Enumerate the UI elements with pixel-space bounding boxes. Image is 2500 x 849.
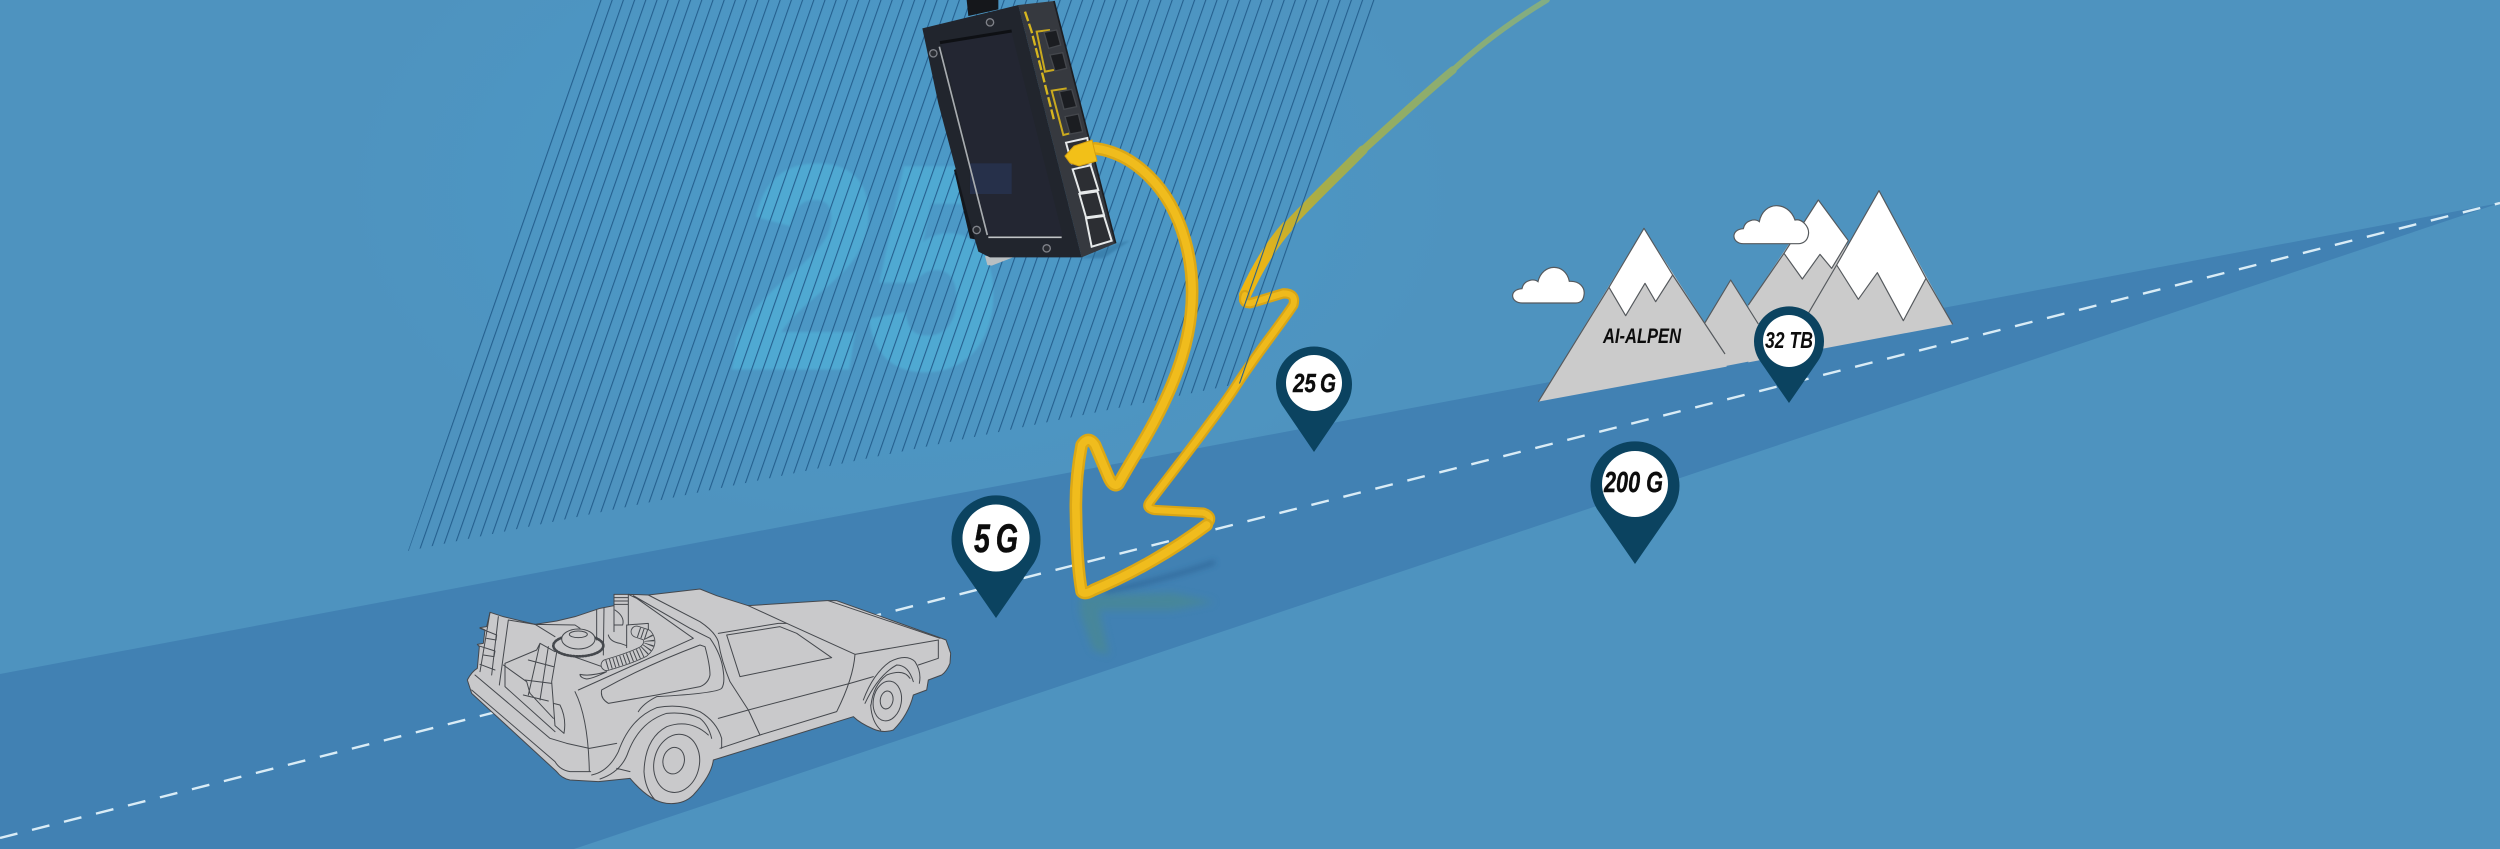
inner panel: [942, 32, 1063, 235]
yellow label strip: [1025, 12, 1054, 120]
faded blue overlay: [970, 163, 1012, 194]
big faded number 25: 25: [734, 107, 1005, 429]
cable shadow on road: [1105, 562, 1215, 592]
upper ports: [1044, 30, 1083, 134]
front wheel: [870, 672, 910, 730]
cable lower section: [1148, 293, 1294, 525]
cable tail: [1245, 0, 1547, 295]
top connector: [967, 0, 998, 16]
front wheel arch: [863, 657, 920, 703]
hatched stripe field: [400, 0, 1400, 560]
side panel: [1018, 1, 1116, 257]
mountains: AI-Alpen: [1513, 191, 1953, 402]
side panel dark edge: [1054, 1, 1116, 243]
map pin: 5G: [952, 495, 1040, 618]
time machine pipes: [597, 594, 648, 655]
snow caps: [1609, 191, 1926, 321]
road centre dashed line: [0, 203, 2500, 838]
device shadow: [1080, 241, 1130, 258]
car: DeLorean time machine: [467, 589, 951, 804]
network switch device: [922, 0, 1130, 266]
yellow cable: right strand fading to green: [1148, 0, 1547, 525]
pin label 200 G: 200 G: [1603, 467, 1663, 499]
lower ports: [1066, 138, 1112, 247]
map pin: 32 TB: [1754, 306, 1824, 403]
glow behind hatching: [340, 0, 1460, 530]
rear quarter window: [601, 645, 710, 703]
cloud left: [1513, 267, 1584, 303]
front panel: [922, 5, 1082, 257]
map pin: 200 G: [1590, 441, 1680, 564]
corrugated hose: [607, 632, 649, 665]
cable upper section outline: [1076, 148, 1207, 593]
pin label 25G: 25 G: [1292, 368, 1336, 398]
left clip: [954, 167, 978, 240]
pin label 5G: 5 G: [974, 517, 1018, 561]
rear fins and louvres: [478, 612, 580, 685]
panel trim: [939, 31, 1062, 237]
flux gear: [553, 629, 603, 656]
screws: [930, 19, 1050, 252]
map pin: 25G: [1276, 347, 1352, 452]
yellow cable: left strand from switch to arrow tip: [1076, 148, 1207, 593]
mountain outlines: [1538, 253, 1953, 402]
car body: [467, 589, 951, 804]
cable upper section highlight: [1076, 148, 1207, 593]
cable plug: [1065, 140, 1097, 166]
door and sill lines: [718, 640, 938, 748]
rear fender arches: [592, 706, 722, 779]
mountain fills: [1538, 191, 1953, 402]
rear wheel: [644, 724, 708, 800]
engine bay box: [503, 643, 607, 733]
port brackets: [1037, 30, 1070, 135]
cable reflection on road: [1080, 593, 1215, 655]
rear bumper lines: [472, 675, 617, 772]
cloud right: [1734, 206, 1809, 244]
pin label 32 TB: 32 TB: [1765, 327, 1813, 353]
pillar and roof lines: [578, 594, 940, 735]
road surface: [0, 203, 2500, 849]
side window: [727, 627, 832, 677]
mounting bracket: [985, 256, 1017, 266]
label: AI-ALPEN: AI-ALPEN: [1602, 325, 1682, 348]
